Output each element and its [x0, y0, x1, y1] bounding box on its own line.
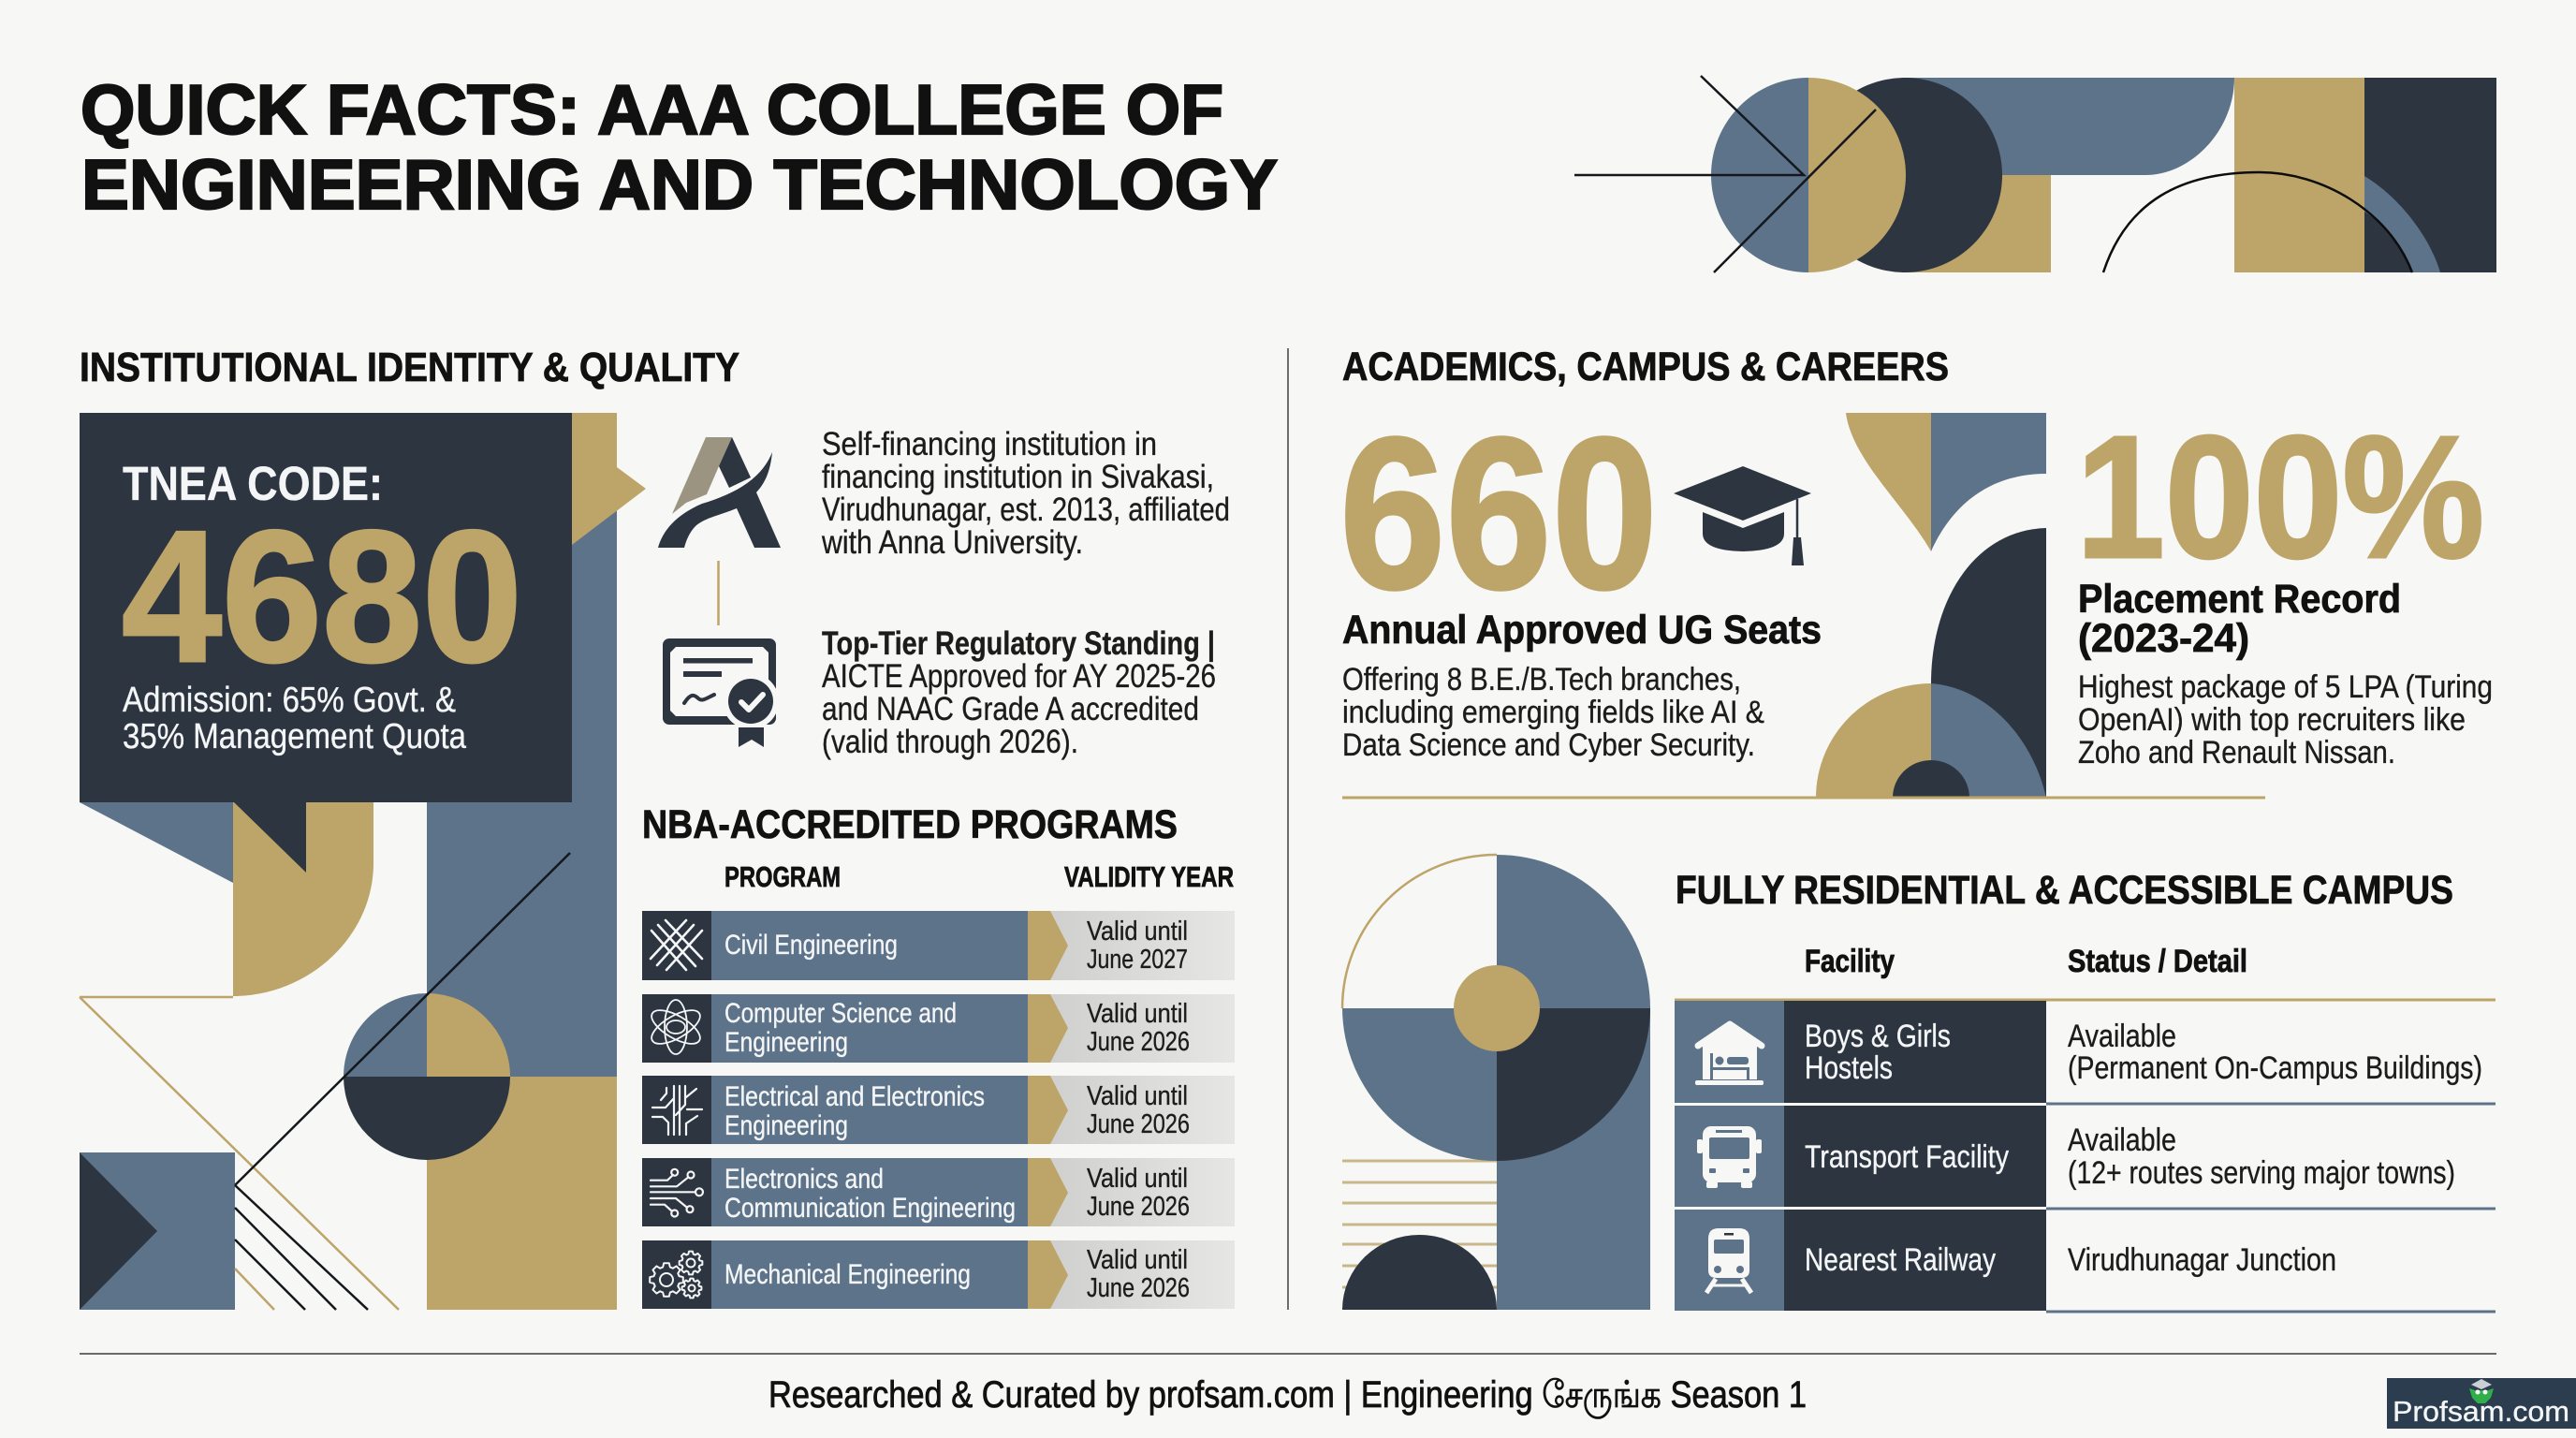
left geometric panel — [80, 506, 617, 1310]
heading: residential campus: FULLY RESIDENTIAL & ACCESSIBLE CAMPUS — [1676, 868, 2453, 913]
icon: train — [1706, 1228, 1751, 1293]
stat: approved seats — [1339, 392, 1822, 763]
table row: computer science: June 2026 — [1087, 1027, 1190, 1057]
center geometric decoration — [1816, 413, 2046, 798]
table row: electronics and communication: Valid until — [1087, 1164, 1188, 1194]
table row: mechanical: Mechanical Engineering — [724, 1259, 971, 1290]
stat: placement record: Highest package of 5 LPA (Turing — [2078, 669, 2493, 705]
table row: electronics and communication: Communication Engineering — [724, 1193, 1016, 1224]
text block: regulatory standing: AICTE Approved for AY 2025-26 — [822, 657, 1216, 695]
table row: hostels: Boys & Girls — [1805, 1019, 1951, 1054]
text block: regulatory standing: and NAAC Grade A accredited — [822, 690, 1199, 727]
text block: regulatory standing: (valid through 2026). — [822, 723, 1078, 760]
table header: facilities: Facility — [1805, 944, 1895, 979]
text block: institution summary: financing institution in Sivakasi, — [822, 458, 1214, 495]
icon: bus — [1697, 1126, 1762, 1188]
section heading: institutional identity: INSTITUTIONAL IDENTITY & QUALITY — [80, 345, 739, 390]
table row: civil engineering: June 2027 — [1087, 945, 1188, 975]
table row: computer science: Valid until — [1087, 999, 1188, 1029]
stat: placement record: (2023-24) — [2078, 616, 2249, 661]
icon: civil crossed beams — [651, 920, 702, 970]
table row: electrical and electronics: Engineering — [724, 1110, 848, 1141]
title: QUICK FACTS: AAA COLLEGE OF — [80, 70, 1223, 149]
table row: electronics and communication: June 2026 — [1087, 1192, 1190, 1222]
brand badge — [2387, 1378, 2576, 1429]
icon: graduation cap — [1674, 466, 1811, 565]
table row: mechanical — [642, 1240, 1235, 1309]
table header: programs: VALIDITY YEAR — [1064, 860, 1234, 893]
table row: railway: Nearest Railway — [1805, 1242, 1996, 1278]
table row: electrical and electronics: June 2026 — [1087, 1109, 1190, 1139]
title: ENGINEERING AND TECHNOLOGY — [81, 145, 1278, 224]
table row: computer science — [642, 994, 1235, 1063]
icon: hostel — [1695, 1024, 1764, 1085]
table row: railway — [1675, 1210, 2496, 1312]
table row: electronics and communication — [642, 1158, 1235, 1226]
icon: college logo — [658, 437, 781, 548]
text block: institution summary: with Anna University. — [821, 523, 1083, 561]
brand badge: Profsam.com — [2393, 1395, 2569, 1428]
icon: electrical circuit — [652, 1086, 702, 1135]
table row: electrical and electronics — [642, 1076, 1235, 1144]
table row: railway: Virudhunagar Junction — [2068, 1242, 2336, 1278]
icon: certificate — [663, 638, 779, 747]
table row: hostels: Available — [2068, 1019, 2176, 1054]
header geometric decoration — [1574, 76, 2496, 272]
text block: institution summary — [821, 425, 1230, 561]
table row: hostels: (Permanent On-Campus Buildings) — [2068, 1050, 2482, 1086]
icon: atom — [647, 1000, 705, 1054]
table header: programs: PROGRAM — [724, 860, 841, 893]
text block: institution summary: Self-financing institution in — [822, 425, 1157, 462]
heading: NBA programs: NBA-ACCREDITED PROGRAMS — [642, 802, 1178, 847]
table row: transport — [1675, 1106, 2496, 1209]
table row: transport: Available — [2068, 1123, 2176, 1158]
table row: transport: Transport Facility — [1805, 1139, 2009, 1175]
stat: placement record: 100% — [2076, 401, 2484, 594]
callout: TNEA code: 4680 — [122, 492, 522, 701]
callout: TNEA code: TNEA CODE: — [123, 457, 383, 510]
callout: TNEA code — [80, 413, 646, 873]
text block: regulatory standing: Top-Tier Regulatory Standing | — [822, 625, 1215, 662]
footer credit: Researched & Curated by profsam.com | Engineering சேருங்க Season 1 — [768, 1374, 1807, 1418]
stat: placement record: Zoho and Renault Nissan. — [2078, 735, 2395, 770]
stat: approved seats: Data Science and Cyber Security. — [1342, 727, 1755, 763]
callout: TNEA code: Admission: 65% Govt. & — [123, 681, 456, 720]
table row: electrical and electronics: Electrical and Electronics — [724, 1081, 985, 1112]
lower geometric decoration — [1342, 855, 1650, 1310]
callout: TNEA code: 35% Management Quota — [123, 717, 467, 756]
stat: approved seats: Annual Approved UG Seats — [1342, 608, 1822, 653]
stat: placement record — [2076, 401, 2493, 770]
icon: gears — [650, 1252, 702, 1298]
stat: placement record: Placement Record — [2078, 577, 2401, 622]
table header: facilities: Status / Detail — [2068, 944, 2247, 979]
table header: facilities — [1805, 944, 2247, 979]
table row: computer science: Computer Science and — [724, 998, 957, 1029]
title — [80, 70, 1278, 224]
table row: civil engineering — [642, 911, 1235, 980]
table row: civil engineering: Valid until — [1087, 917, 1188, 946]
stat: approved seats: 660 — [1339, 392, 1658, 634]
icon: owl mascot — [2469, 1379, 2494, 1403]
table row: electronics and communication: Electronics and — [724, 1164, 884, 1195]
table row: hostels: Hostels — [1805, 1050, 1893, 1086]
table row: transport: (12+ routes serving major towns) — [2068, 1155, 2455, 1191]
icon: circuit traces — [651, 1169, 703, 1217]
section heading: academics: ACADEMICS, CAMPUS & CAREERS — [1342, 345, 1949, 389]
text block: institution summary: Virudhunagar, est. 2013, affiliated — [822, 491, 1230, 528]
table row: mechanical: Valid until — [1087, 1245, 1188, 1275]
stat: placement record: OpenAI) with top recruiters like — [2078, 702, 2466, 738]
table row: computer science: Engineering — [724, 1027, 848, 1058]
table row: civil engineering: Civil Engineering — [724, 930, 898, 961]
table row: mechanical: June 2026 — [1087, 1273, 1190, 1303]
table row: hostels — [1675, 1001, 2496, 1104]
stat: approved seats: including emerging fields like AI & — [1342, 695, 1764, 730]
table header: programs — [724, 860, 1234, 893]
stat: approved seats: Offering 8 B.E./B.Tech branches, — [1342, 662, 1741, 697]
table row: electrical and electronics: Valid until — [1087, 1081, 1188, 1111]
text block: regulatory standing — [822, 625, 1216, 760]
